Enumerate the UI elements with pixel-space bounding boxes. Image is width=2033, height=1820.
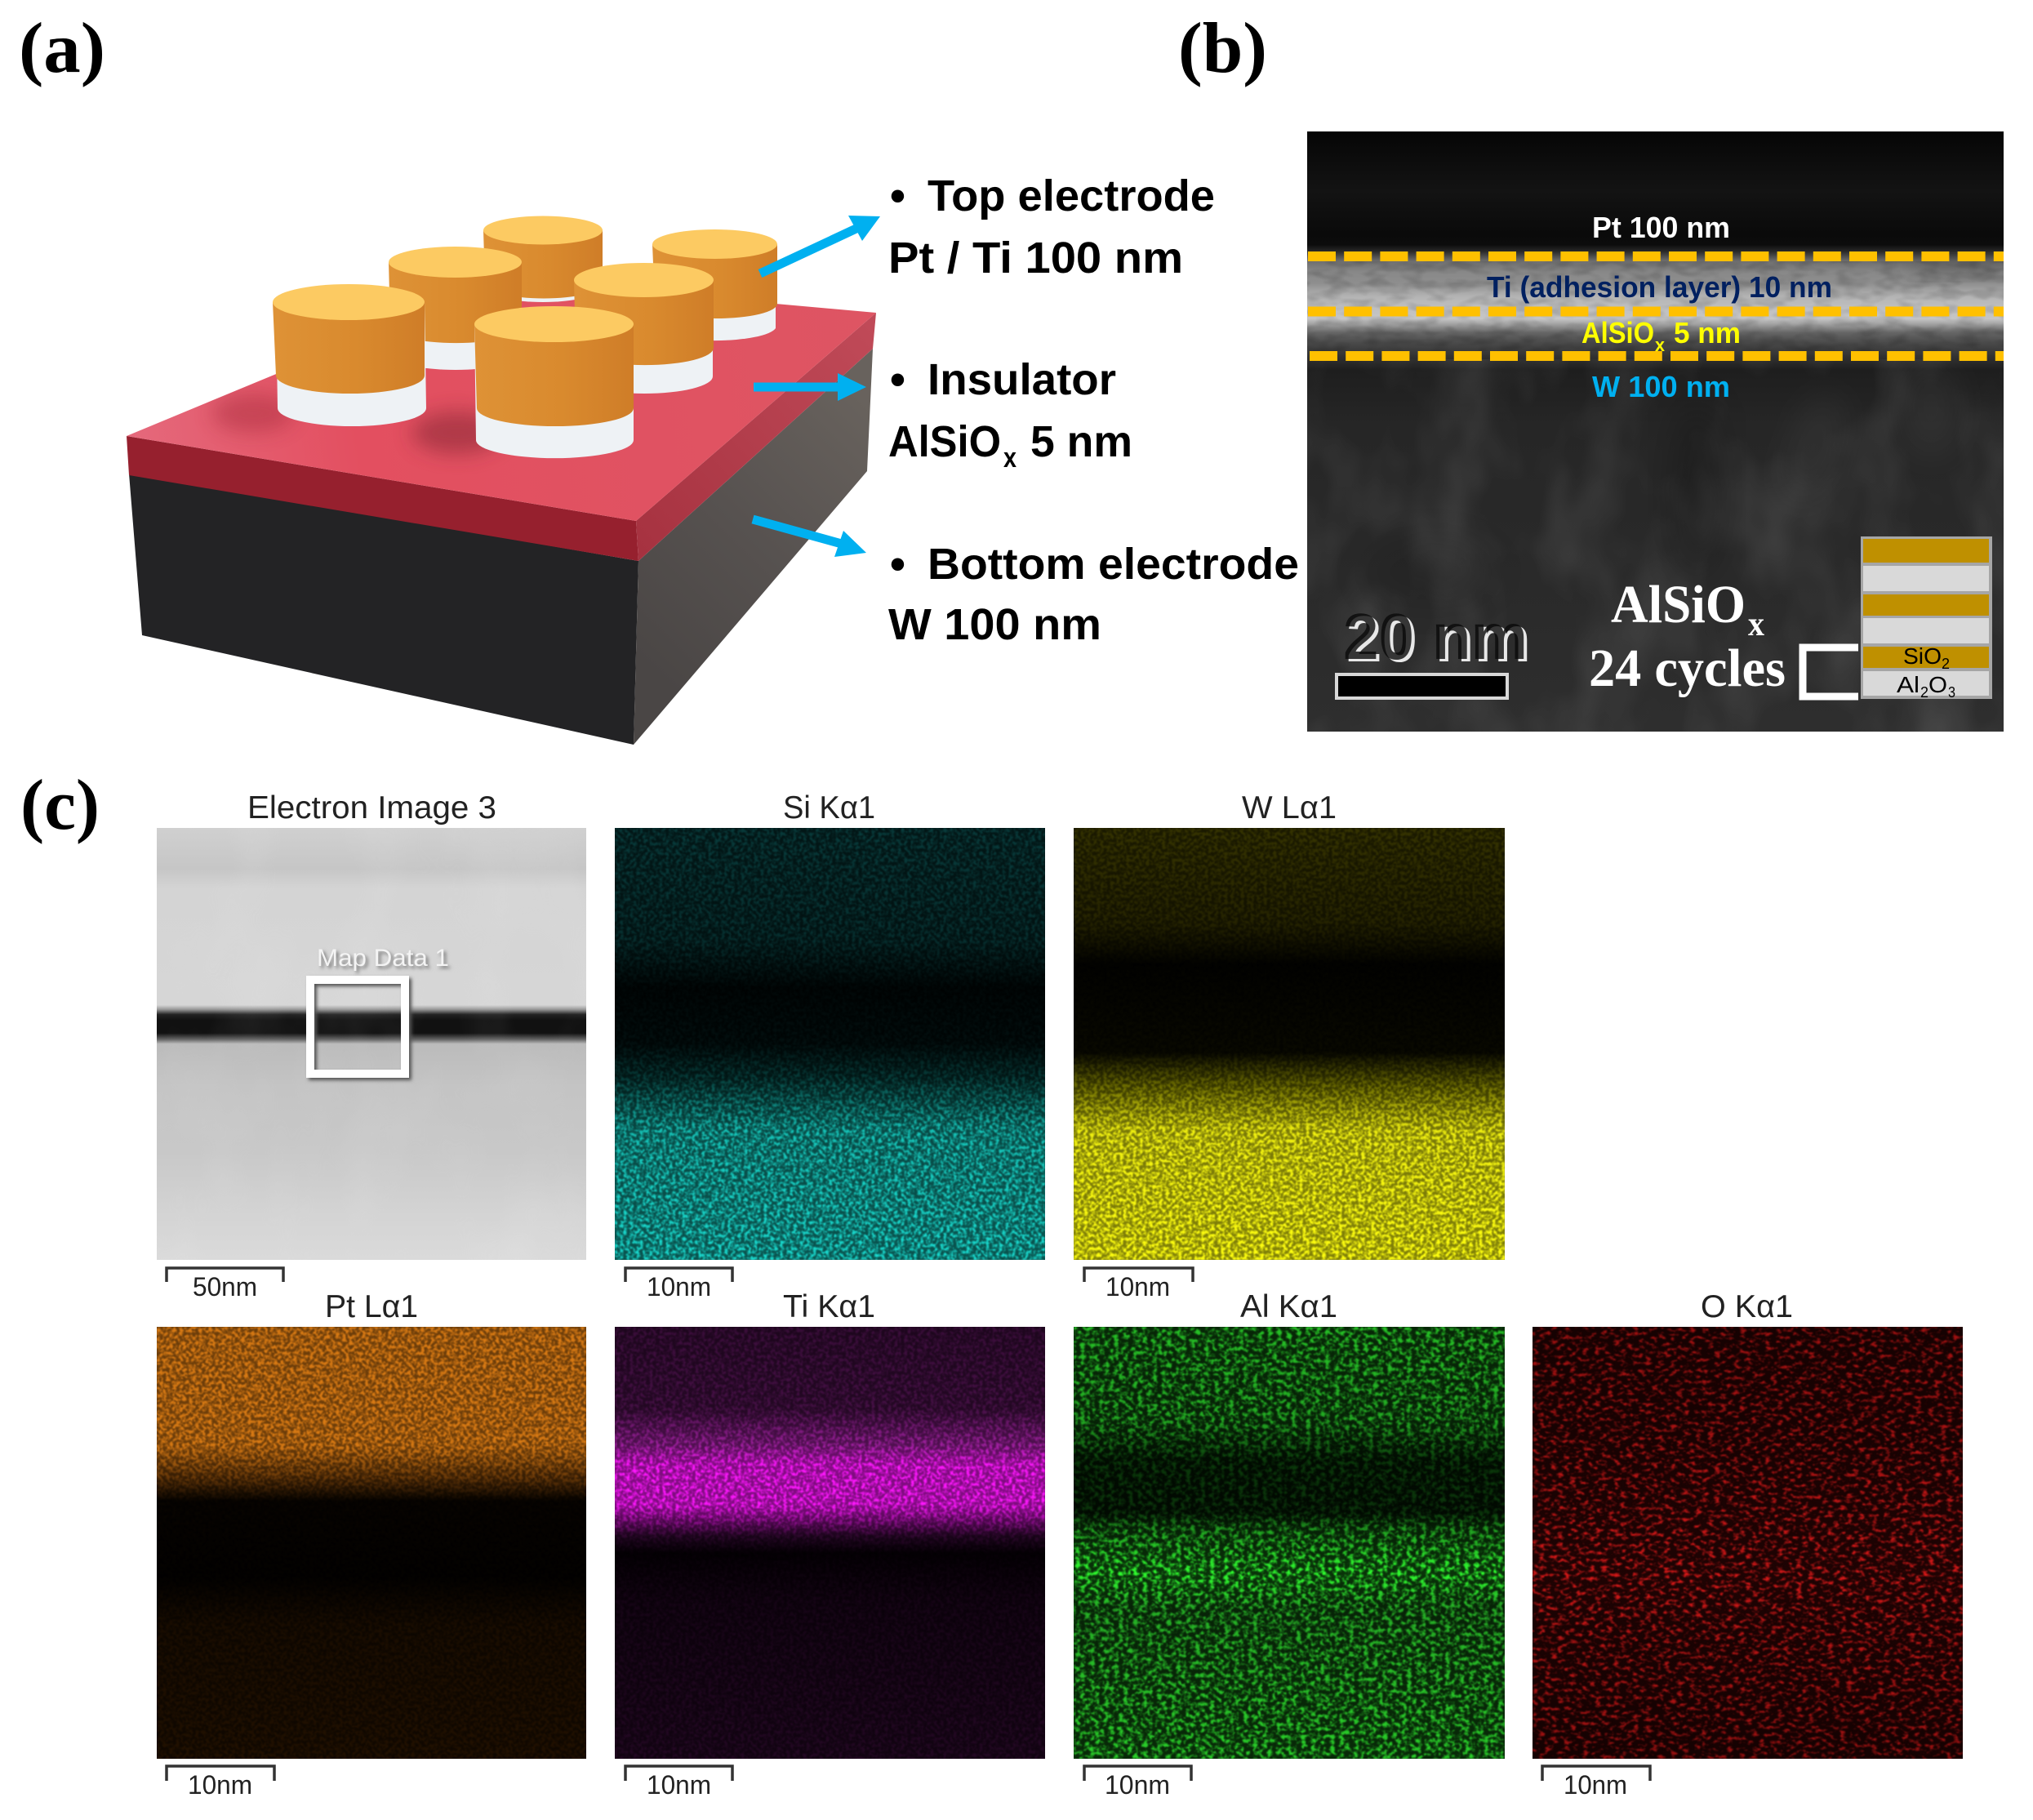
panel c: Pt map <box>157 1289 586 1800</box>
stack caption: x <box>1748 606 1764 643</box>
arrow: to top electrode <box>760 216 880 274</box>
insulator layer <box>127 277 876 561</box>
inset: SiO2 / Al2O3 stack: SiO <box>1903 643 1942 669</box>
layer boundary dashed lines <box>1308 256 2006 356</box>
legend: top electrode <box>888 171 1215 283</box>
panel c: electron image <box>157 790 586 1302</box>
inset: SiO2 / Al2O3 stack: 2 <box>1920 684 1928 701</box>
legend: bottom electrode: W 100 nm <box>888 600 1101 649</box>
map data selection box: Map Data 1 <box>317 945 449 972</box>
panel c: Ti map: Ti Kα1 <box>783 1289 875 1324</box>
inset: SiO2 / Al2O3 stack <box>1861 536 1992 701</box>
legend: bottom electrode: Bottom electrode <box>928 540 1299 589</box>
TEM scale bar: 20 nm <box>1343 600 1528 673</box>
legend: top electrode: Pt / Ti 100 nm <box>888 234 1183 283</box>
legend: top electrode: • <box>890 171 905 220</box>
scale bar 10nm <box>1542 1766 1650 1800</box>
TEM scale bar <box>1335 613 1527 700</box>
inset: SiO2 / Al2O3 stack: 3 <box>1948 684 1955 701</box>
panel c: Si map <box>615 790 1045 1302</box>
TEM scale bar: 20 nm <box>1346 603 1531 675</box>
label (c): (c) <box>20 766 100 845</box>
inset: SiO2 / Al2O3 stack: 2 <box>1942 656 1950 672</box>
panel c: O map: O Kα1 <box>1701 1289 1793 1324</box>
legend: insulator: x <box>1003 443 1016 474</box>
layer labels: x <box>1655 335 1666 355</box>
scale bar 10nm: 10nm <box>188 1770 252 1800</box>
panel c: Al map <box>1074 1289 1505 1800</box>
inset: SiO2 / Al2O3 stack: Al <box>1897 672 1920 697</box>
stack caption: AlSiO <box>1611 575 1746 634</box>
scale bar 10nm <box>1084 1268 1193 1302</box>
scale bar 10nm: 10nm <box>647 1272 711 1302</box>
bottom electrode block <box>129 349 873 745</box>
label (b): (b) <box>1178 9 1267 88</box>
legend: bottom electrode <box>888 540 1299 649</box>
inset: SiO2 / Al2O3 stack: O <box>1928 672 1947 697</box>
panel c: Ti map <box>615 1289 1045 1800</box>
panel c: O map <box>1533 1289 1963 1800</box>
layer labels: Ti (adhesion layer) 10 nm <box>1487 270 1832 304</box>
arrow: to bottom electrode <box>753 519 866 557</box>
scale bar 10nm <box>167 1766 274 1800</box>
layer labels: AlSiO <box>1581 316 1654 349</box>
arrow: to insulator <box>754 373 866 401</box>
scale bar 10nm <box>625 1766 732 1800</box>
scale bar 10nm <box>625 1268 732 1302</box>
scale bar 10nm: 10nm <box>1105 1272 1170 1302</box>
map data selection box: Map Data 1 <box>319 947 452 974</box>
panel c: Si map: Si Kα1 <box>783 790 875 825</box>
panel c: W map <box>1074 790 1505 1302</box>
panel c: Pt map: Pt Lα1 <box>325 1289 418 1324</box>
panel c: Al map: Al Kα1 <box>1240 1289 1337 1324</box>
map data selection box <box>310 945 452 1076</box>
panel c: electron image: Electron Image 3 <box>247 790 496 825</box>
scale bar 10nm: 10nm <box>1105 1770 1170 1800</box>
scale bar 50nm: 50nm <box>193 1272 257 1302</box>
stack caption <box>1590 585 1785 697</box>
legend: insulator: 5 nm <box>1030 417 1132 466</box>
scale bar 10nm: 10nm <box>1564 1770 1627 1800</box>
layer labels: Pt 100 nm <box>1592 211 1730 244</box>
legend: insulator: AlSiO <box>888 417 1001 466</box>
scale bar 10nm <box>1084 1766 1191 1800</box>
layer labels <box>1487 211 1832 403</box>
top electrode pillars <box>273 216 777 458</box>
legend: top electrode: Top electrode <box>928 171 1215 220</box>
legend: insulator: Insulator <box>928 355 1116 404</box>
callout bracket <box>1803 647 1858 696</box>
legend: insulator: • <box>890 355 905 404</box>
scale bar 50nm <box>167 1268 283 1302</box>
layer labels: 5 nm <box>1674 316 1741 349</box>
label (a): (a) <box>19 9 105 88</box>
layer labels: W 100 nm <box>1592 370 1730 403</box>
legend: insulator <box>888 355 1132 474</box>
panel b: cross-section TEM image <box>1307 131 2017 732</box>
scale bar 10nm: 10nm <box>647 1770 711 1800</box>
legend: bottom electrode: • <box>890 540 905 589</box>
stack caption: 24 cycles <box>1589 639 1786 698</box>
panel c: W map: W Lα1 <box>1242 790 1337 825</box>
panel a: 3D device schematic <box>127 216 876 745</box>
